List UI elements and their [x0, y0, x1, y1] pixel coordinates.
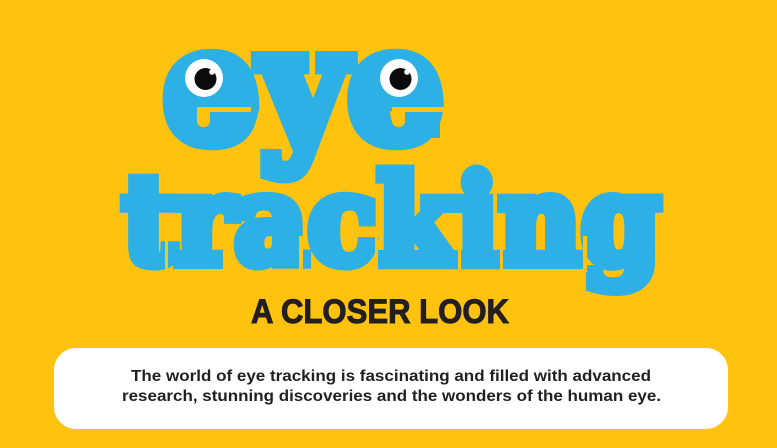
title: tracking: tracking: [122, 148, 660, 292]
subtitle: A CLOSER LOOK: [251, 293, 509, 331]
intro text line 1: The world of eye tracking is fascinating and filled with advanced: [131, 368, 651, 385]
panel: introduction: [54, 348, 728, 429]
icon: left eye: [185, 59, 223, 97]
icon: right eye: [380, 59, 418, 97]
intro text line 2: research, stunning discoveries and the wonders of the human eye.: [122, 388, 661, 405]
